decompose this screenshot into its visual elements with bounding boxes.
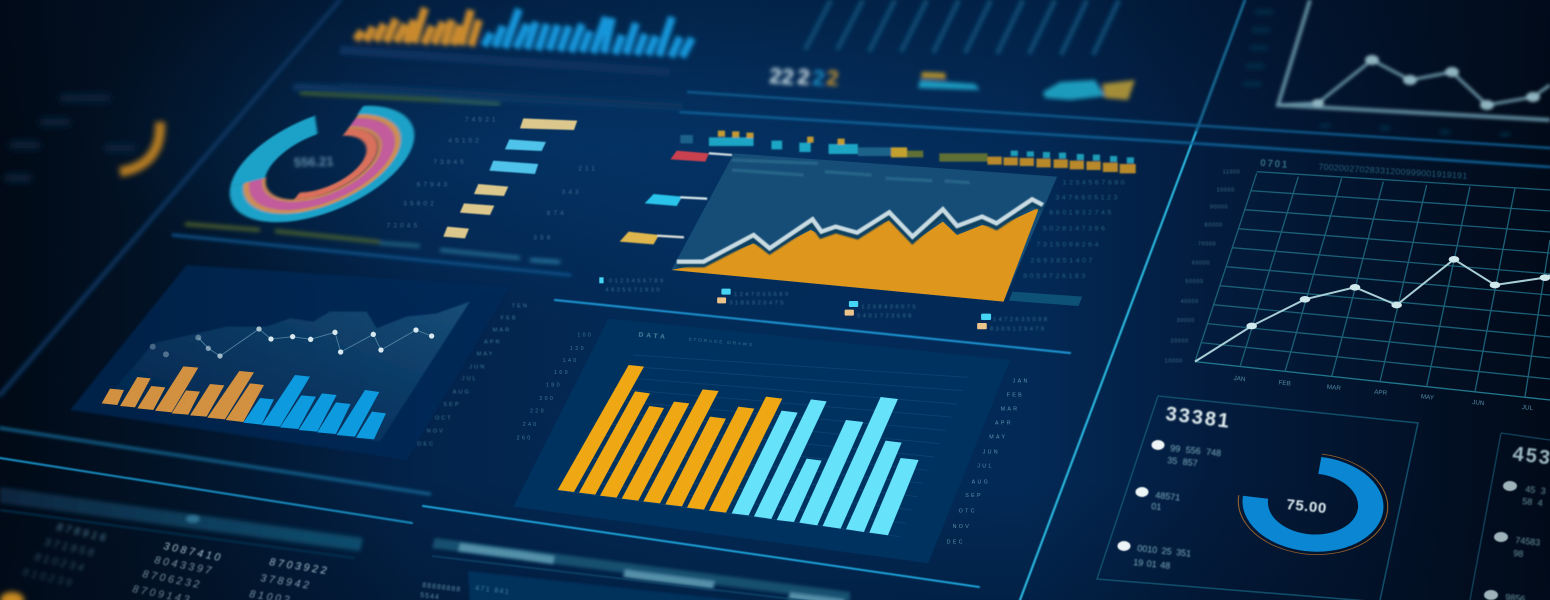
table numbers, middle columns: 8706232 xyxy=(141,568,203,591)
right side list: 8601932745 xyxy=(1049,210,1114,217)
right month labels: JAN xyxy=(1013,379,1030,385)
right month labels xyxy=(947,379,1030,545)
panel: bottom centre strip xyxy=(420,538,850,600)
status ribbon xyxy=(680,131,1136,173)
y axis labels xyxy=(1165,170,1240,365)
table numbers, middle columns xyxy=(131,540,330,600)
right month labels: NOV xyxy=(953,524,971,530)
right side list: 1234567890 xyxy=(1062,180,1127,186)
left tag: red xyxy=(670,151,732,162)
panel: lower left combo chart xyxy=(70,265,529,460)
right side list xyxy=(1023,180,1127,280)
bar labels: 45102 xyxy=(448,138,482,145)
bar labels: 358 xyxy=(533,234,553,241)
left labels: 220 xyxy=(530,409,546,415)
summary digits: 2 xyxy=(826,65,840,91)
month labels: JAN xyxy=(1233,375,1246,383)
ring value: 556.21 xyxy=(294,154,334,170)
month labels: MAY xyxy=(1420,393,1435,402)
bar labels: 211 xyxy=(578,166,598,173)
summary digits: 22 xyxy=(769,63,795,90)
bar labels: 73845 xyxy=(433,159,467,166)
bullet text: 98 xyxy=(1513,548,1524,559)
left labels: 140 xyxy=(563,358,579,364)
right side list: 5028147396 xyxy=(1043,226,1107,233)
small stacked block xyxy=(918,80,980,90)
strip xyxy=(432,538,850,600)
right month labels: OTC xyxy=(959,509,977,515)
legend text: 0123456789 xyxy=(609,278,666,284)
month labels: FEB xyxy=(501,315,518,321)
bar labels: 67943 xyxy=(417,182,450,189)
right month labels: MAR xyxy=(1001,407,1019,413)
month labels: JUN xyxy=(469,364,486,370)
legend text xyxy=(605,278,1050,333)
panel: 45 card xyxy=(1470,433,1550,600)
horizontal bars xyxy=(387,117,598,241)
list text: 48571 xyxy=(1155,490,1181,503)
left tag: yellow xyxy=(620,232,684,244)
bar labels xyxy=(387,117,598,241)
y axis labels: 60000 xyxy=(1192,260,1210,266)
subheading: STORAGE DRAWS xyxy=(688,337,754,348)
gauge value: 75.00 xyxy=(1286,496,1328,517)
small mixed block xyxy=(1043,80,1105,100)
grid lines xyxy=(557,355,968,537)
bar labels: 874 xyxy=(547,210,567,217)
strip labels xyxy=(420,582,461,600)
month labels xyxy=(1233,375,1534,412)
orange bars xyxy=(102,366,264,422)
panel: top right line chart xyxy=(1243,0,1550,135)
month labels: TEN xyxy=(512,303,529,309)
month labels xyxy=(417,303,529,447)
list text: 0010 25 351 xyxy=(1137,543,1192,559)
orange bars xyxy=(558,365,782,513)
summary digits: 2 xyxy=(812,65,826,91)
month labels: SEP xyxy=(443,402,461,408)
y axis labels: 90000 xyxy=(1210,205,1228,211)
bar labels: 343 xyxy=(562,189,582,196)
table numbers, blurred column xyxy=(21,521,110,590)
table numbers, blurred column: 878916 xyxy=(55,521,110,545)
legends xyxy=(599,277,991,329)
bullets xyxy=(1484,481,1517,600)
bullet text: 74583 xyxy=(1515,535,1541,548)
left labels: 100 xyxy=(577,333,593,339)
bullet text: 45 3 xyxy=(1525,484,1546,496)
left labels: 240 xyxy=(523,422,539,428)
heading: DATA xyxy=(638,332,668,341)
chart captions xyxy=(732,160,970,183)
left labels: 120 xyxy=(570,346,586,352)
right month labels: SEP xyxy=(965,493,983,499)
legend text: 1247035689 xyxy=(734,292,791,298)
y axis labels: 40000 xyxy=(1181,299,1199,305)
panel: area chart xyxy=(599,131,1136,333)
table numbers, middle columns: 8043397 xyxy=(153,554,215,577)
y axis labels: 30000 xyxy=(1177,318,1195,324)
month labels: JUL xyxy=(1521,404,1534,412)
legend text: 1472635098 xyxy=(993,317,1050,323)
orange area xyxy=(671,207,1039,302)
bar labels: 74521 xyxy=(465,117,498,124)
list text: 19 01 48 xyxy=(1133,557,1171,571)
trend points xyxy=(1246,256,1550,329)
month labels: JUL xyxy=(462,376,478,382)
trend line xyxy=(1195,259,1550,362)
y axis labels: 20000 xyxy=(1171,338,1189,344)
table numbers, middle columns: 8703922 xyxy=(269,556,330,577)
summary digits: 2 xyxy=(797,64,811,90)
legend text: 4825671930 xyxy=(605,288,662,294)
bullet list xyxy=(1118,440,1164,551)
strip under ring xyxy=(185,224,560,262)
table numbers, middle columns: 3087410 xyxy=(162,540,224,565)
right month labels: MAY xyxy=(989,434,1007,440)
chart subheading: 70020027028331200999001919191 xyxy=(1318,161,1468,181)
y axis labels: 10000 xyxy=(1165,359,1183,365)
right side list: 3476905123 xyxy=(1055,195,1120,201)
legend text: 5401723698 xyxy=(857,313,914,319)
panel: ring chart with bars xyxy=(185,93,598,262)
panel: bottom left table xyxy=(0,487,363,600)
table numbers, middle columns: 378942 xyxy=(260,572,313,592)
card value: 33381 xyxy=(1164,403,1232,433)
table numbers, blurred column: 810234 xyxy=(33,551,88,575)
y axis labels: 50000 xyxy=(1185,279,1203,285)
bars: orange group xyxy=(356,8,479,46)
month labels: JUN xyxy=(1472,399,1485,407)
legend text: 3186920475 xyxy=(729,300,786,306)
left labels: 180 xyxy=(546,383,562,389)
right month labels: JUN xyxy=(983,449,1000,455)
panel: main bar chart xyxy=(513,318,1030,563)
right month labels: AUG xyxy=(972,479,990,485)
right side list: 9054726183 xyxy=(1023,273,1088,280)
line shadow xyxy=(677,203,1043,264)
y axis labels: 11000 xyxy=(1223,170,1240,176)
strip highlights xyxy=(458,543,845,600)
grid xyxy=(1195,172,1550,400)
ring chart xyxy=(216,101,429,228)
bar labels: 72045 xyxy=(387,222,420,229)
right side list: 7315098264 xyxy=(1036,242,1101,249)
month labels: MAY xyxy=(477,352,494,358)
panel: 33381 gauge card xyxy=(1097,396,1418,600)
month labels: AUG xyxy=(453,389,471,395)
table numbers, blurred column: 810239 xyxy=(21,566,76,590)
left labels: 160 xyxy=(554,370,570,376)
bullet text xyxy=(1505,484,1546,600)
left edge blurred widgets xyxy=(0,98,160,600)
area background xyxy=(103,302,470,442)
list text: 01 xyxy=(1151,501,1162,512)
month labels: MAR xyxy=(1326,384,1342,392)
panel: line chart with grid xyxy=(1165,158,1550,412)
summary digits xyxy=(769,63,840,91)
month labels: DEC xyxy=(417,441,435,447)
right side list: 2693851407 xyxy=(1030,257,1095,264)
left labels: 200 xyxy=(539,396,555,402)
y axis labels: 10000 xyxy=(1217,187,1235,193)
strip labels: 88888888 xyxy=(422,582,461,594)
month labels: NOV xyxy=(427,429,445,435)
left tag: cyan xyxy=(645,194,707,206)
header band xyxy=(0,487,363,551)
donut gauge xyxy=(1230,445,1396,563)
list text: 99 556 748 xyxy=(1170,443,1222,458)
legend text: 1298436075 xyxy=(861,304,918,310)
lower panel heading: 471 841 xyxy=(475,585,510,596)
chart background xyxy=(671,153,1057,302)
month labels: FEB xyxy=(1278,379,1291,388)
month labels: OCT xyxy=(435,415,453,421)
bar labels: 35602 xyxy=(403,200,437,207)
y axis labels: 80000 xyxy=(1205,222,1223,228)
list text: 35 857 xyxy=(1167,455,1198,468)
month labels: APR xyxy=(484,339,502,345)
heading strip xyxy=(300,93,500,104)
right month labels: APR xyxy=(995,420,1013,426)
lower panel xyxy=(468,571,780,600)
point line xyxy=(150,326,434,359)
chart points xyxy=(1312,55,1540,110)
panel: top middle blurred columns and summary xyxy=(769,0,1135,100)
list button xyxy=(1009,292,1082,306)
chart heading: 0701 xyxy=(1260,158,1289,171)
right month labels: FEB xyxy=(1007,393,1024,399)
right month labels: JUL xyxy=(977,464,994,470)
month labels: APR xyxy=(1374,389,1388,397)
y axis labels: 70000 xyxy=(1198,241,1216,247)
cyan bars xyxy=(732,397,919,535)
month labels: MAR xyxy=(493,327,511,333)
left labels xyxy=(517,333,593,441)
bullet text: 58 4 xyxy=(1522,496,1543,508)
bars: blue group xyxy=(484,9,692,57)
blue bars xyxy=(243,375,386,439)
trend line xyxy=(677,199,1043,262)
table numbers, blurred column: 371958 xyxy=(43,536,98,560)
panel: top bar chart xyxy=(340,8,692,105)
left labels: 260 xyxy=(517,435,533,441)
list text xyxy=(1133,443,1222,571)
legend text: 8305129476 xyxy=(990,327,1047,333)
right month labels: DEC xyxy=(947,539,965,545)
